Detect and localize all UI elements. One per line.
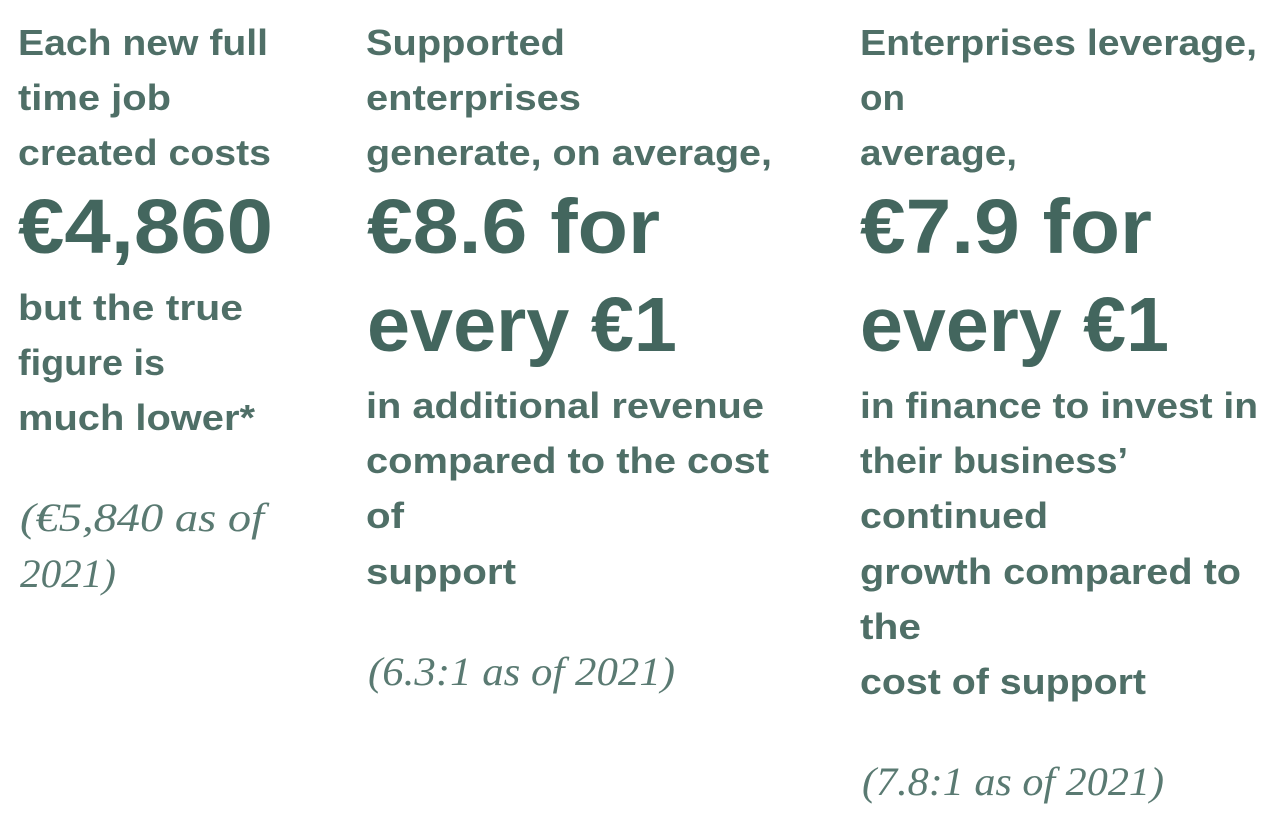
headline figure: €4,860: €4,860 xyxy=(18,184,273,270)
headline figure: €8.6 for every €1: €8.6 for xyxy=(367,184,660,270)
supporting text: finance for growth: their business’ xyxy=(860,440,1128,481)
headline figure: €7.9 for every €1: every €1 xyxy=(860,282,1169,368)
panel: cost per job xyxy=(18,22,273,596)
intro text: finance leveraged: on xyxy=(860,77,905,118)
intro text: finance leveraged: Enterprises leverage, xyxy=(860,22,1257,63)
headline figure: €7.9 for every €1 xyxy=(860,184,1169,368)
comparison note: 2021 job cost: (€5,840 as of xyxy=(20,495,270,540)
supporting text: true figure xyxy=(18,287,255,438)
supporting text: finance for growth: cost of support xyxy=(860,661,1146,702)
panel: finance leveraged xyxy=(860,22,1258,804)
intro text: cost per job: time job xyxy=(18,77,171,118)
comparison note: 2021 revenue ratio: (6.3:1 as of 2021) xyxy=(368,649,675,694)
supporting text: finance for growth: in finance to invest in xyxy=(860,385,1258,426)
intro text: cost per job: Each new full xyxy=(18,22,268,63)
intro text: finance leveraged xyxy=(860,22,1257,173)
supporting text: true figure: but the true xyxy=(18,287,243,328)
comparison note: 2021 job cost: 2021) xyxy=(20,551,116,596)
supporting text: additional revenue xyxy=(366,385,769,592)
comparison note: 2021 job cost xyxy=(20,495,270,596)
intro text: cost per job: created costs xyxy=(18,132,271,173)
panel: revenue generated xyxy=(366,22,772,694)
supporting text: additional revenue: in additional revenue xyxy=(366,385,764,426)
headline figure: €8.6 for every €1: every €1 xyxy=(367,282,677,368)
supporting text: additional revenue: of xyxy=(366,495,405,536)
supporting text: finance for growth: continued xyxy=(860,495,1048,536)
headline figure: €7.9 for every €1: €7.9 for xyxy=(860,184,1152,270)
intro text: revenue generated: enterprises xyxy=(366,77,581,118)
supporting text: true figure: figure is xyxy=(18,342,165,383)
intro text: cost per job xyxy=(18,22,271,173)
supporting text: finance for growth: the xyxy=(860,606,921,647)
intro text: revenue generated: generate, on average, xyxy=(366,132,772,173)
intro text: revenue generated xyxy=(366,22,772,173)
supporting text: additional revenue: support xyxy=(366,551,516,592)
supporting text: finance for growth xyxy=(860,385,1258,702)
supporting text: true figure: much lower* xyxy=(18,397,255,438)
supporting text: additional revenue: compared to the cost xyxy=(366,440,769,481)
comparison note: 2021 finance ratio: (7.8:1 as of 2021) xyxy=(862,759,1164,804)
intro text: revenue generated: Supported xyxy=(366,22,565,63)
supporting text: finance for growth: growth compared to xyxy=(860,551,1241,592)
intro text: finance leveraged: average, xyxy=(860,132,1017,173)
headline figure: €8.6 for every €1 xyxy=(367,184,677,368)
